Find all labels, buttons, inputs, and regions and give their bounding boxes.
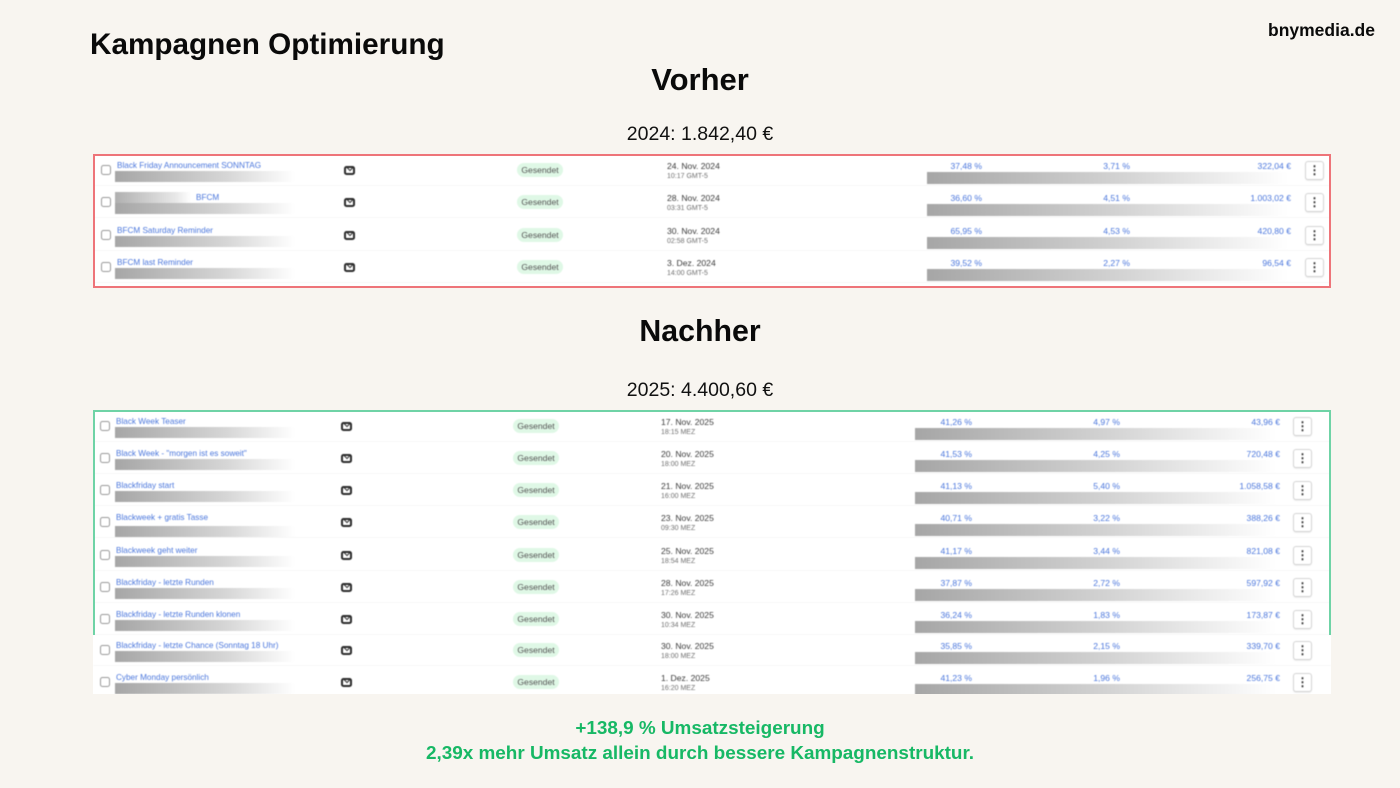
send date: 02:58 GMT-5 <box>667 238 708 245</box>
row: Blackfriday letzte Chance <box>93 634 1331 666</box>
campaign name <box>114 640 281 662</box>
send date <box>660 641 714 660</box>
metrics: 4,97 % <box>1093 417 1120 427</box>
metrics: 3,44 % <box>1093 546 1120 556</box>
send date: 18:15 MEZ <box>661 429 695 436</box>
status badge: Gesendet <box>517 677 555 687</box>
metrics <box>926 258 1292 282</box>
campaign name <box>114 578 281 600</box>
menu button: ⋮ <box>1308 228 1320 242</box>
metrics: 5,40 % <box>1093 481 1120 491</box>
campaign name: Blackweek + gratis Tasse <box>116 512 208 522</box>
send date <box>660 513 714 532</box>
checkbox <box>101 165 111 175</box>
metrics: 1.058,58 € <box>1239 481 1280 491</box>
send date: 16:20 MEZ <box>661 685 695 692</box>
send date <box>666 258 716 277</box>
metrics: 41,23 % <box>940 673 972 683</box>
metrics <box>926 193 1292 216</box>
menu button <box>1305 193 1324 212</box>
send date: 28. Nov. 2025 <box>661 578 714 588</box>
icon: mail <box>341 646 352 655</box>
menu button <box>1293 610 1312 629</box>
metrics: 1,96 % <box>1093 673 1120 683</box>
send date: 25. Nov. 2025 <box>661 546 714 556</box>
brand label: bnymedia.de <box>1268 20 1375 40</box>
status badge: Gesendet <box>517 614 555 624</box>
campaign name: Cyber Monday persönlich <box>116 672 209 682</box>
metrics: 322,04 € <box>1258 161 1291 171</box>
panel: campaign table 2025 <box>93 410 1331 694</box>
metrics: 37,48 % <box>950 161 982 171</box>
send date: 30. Nov. 2024 <box>667 226 720 236</box>
status badge <box>513 643 559 657</box>
send date: 10:34 MEZ <box>661 622 695 629</box>
metrics: 41,13 % <box>940 481 972 491</box>
campaign name: Blackfriday start <box>116 480 174 490</box>
menu button: ⋮ <box>1296 515 1308 529</box>
campaign name <box>114 192 281 214</box>
panel: campaign table 2024 <box>93 154 1331 288</box>
metrics: 597,92 € <box>1247 578 1280 588</box>
metrics: 41,53 % <box>940 449 972 459</box>
metrics: 2,72 % <box>1093 578 1120 588</box>
heading: Vorher: Vorher <box>651 62 749 97</box>
metrics: 1,83 % <box>1093 610 1120 620</box>
campaign name: Blackfriday - letzte Runden klonen <box>116 610 240 618</box>
campaign name: Blackfriday - letzte Runden <box>116 578 214 586</box>
title: Kampagnen Optimierung <box>90 28 445 61</box>
send date <box>666 161 720 180</box>
metrics <box>914 578 1280 602</box>
status badge <box>513 612 559 626</box>
result summary <box>426 718 974 764</box>
metrics <box>914 673 1280 694</box>
row: Blackfriday letzte Runden <box>93 571 1331 603</box>
status badge: Gesendet <box>521 197 559 207</box>
menu button <box>1293 481 1312 500</box>
row: Cyber Monday persönlich <box>93 666 1331 698</box>
metrics: 4,51 % <box>1103 193 1130 203</box>
menu button: ⋮ <box>1296 548 1308 562</box>
send date <box>666 193 720 212</box>
metrics: 4,53 % <box>1103 226 1130 236</box>
row: BFCM <box>93 186 1331 218</box>
heading: Nachher: Nachher <box>639 315 761 348</box>
status badge: Gesendet <box>517 421 555 431</box>
send date: 3. Dez. 2024 <box>667 258 716 268</box>
campaign name <box>114 610 281 632</box>
metrics: 41,17 % <box>940 546 972 556</box>
status badge <box>513 548 559 562</box>
send date: 20. Nov. 2025 <box>661 449 714 459</box>
menu button: ⋮ <box>1296 451 1308 465</box>
send date: 18:00 MEZ <box>661 461 695 468</box>
send date: 24. Nov. 2024 <box>667 161 720 171</box>
icon: mail <box>341 422 352 431</box>
icon: mail <box>344 166 355 175</box>
status badge <box>517 163 563 177</box>
menu button: ⋮ <box>1296 483 1308 497</box>
send date: 09:30 MEZ <box>661 525 695 532</box>
campaign name <box>114 546 281 568</box>
send date: 17:26 MEZ <box>661 590 695 597</box>
metrics: 388,26 € <box>1247 513 1280 523</box>
campaign name <box>114 672 281 694</box>
checkbox <box>100 614 110 624</box>
icon: mail <box>341 615 352 624</box>
metrics: 43,96 € <box>1251 417 1280 427</box>
icon: mail <box>344 198 355 207</box>
send date: 30. Nov. 2025 <box>661 610 714 620</box>
checkbox <box>100 421 110 431</box>
metrics: 3,22 % <box>1093 513 1120 523</box>
campaign name: BFCM last Reminder <box>117 258 193 266</box>
campaign name: Black Week Teaser <box>116 416 186 426</box>
icon: mail <box>341 486 352 495</box>
status badge <box>517 260 563 274</box>
send date <box>660 578 714 597</box>
send date <box>666 226 720 245</box>
metrics: 2,15 % <box>1093 641 1120 651</box>
icon: mail <box>341 583 352 592</box>
menu button: ⋮ <box>1296 675 1308 689</box>
send date: 17. Nov. 2025 <box>661 417 714 427</box>
status badge: Gesendet <box>517 582 555 592</box>
metrics: 173,87 € <box>1247 610 1280 620</box>
status badge: Gesendet <box>517 517 555 527</box>
campaign name <box>114 160 281 182</box>
revenue 2025: 2025: 4.400,60 € <box>627 379 773 401</box>
menu button <box>1293 641 1312 660</box>
row: Blackweek gratis Tasse <box>93 506 1331 538</box>
send date: 18:54 MEZ <box>661 558 695 565</box>
campaign name: Blackweek geht weiter <box>116 546 197 554</box>
status badge: Gesendet <box>517 550 555 560</box>
menu button: ⋮ <box>1308 195 1320 209</box>
row: BFCM Saturday Reminder <box>93 219 1331 251</box>
status badge: Gesendet <box>521 165 559 175</box>
metrics: 35,85 % <box>940 641 972 651</box>
metrics <box>914 481 1280 504</box>
send date: 28. Nov. 2024 <box>667 193 720 203</box>
icon: mail <box>344 263 355 272</box>
metrics: 96,54 € <box>1262 258 1291 268</box>
send date <box>661 673 710 692</box>
campaign name: BFCM Saturday Reminder <box>117 226 213 234</box>
send date: 30. Nov. 2025 <box>661 641 714 651</box>
send date <box>660 449 714 468</box>
send date: 03:31 GMT-5 <box>667 205 708 212</box>
campaign name: Black Week - "morgen ist es soweit" <box>116 448 247 458</box>
status badge <box>513 675 559 689</box>
metrics <box>914 546 1280 570</box>
checkbox <box>100 677 110 687</box>
campaign name <box>114 512 281 538</box>
send date: 21. Nov. 2025 <box>661 481 714 491</box>
metrics: 37,87 % <box>940 578 972 588</box>
status badge <box>513 483 559 497</box>
metrics: 2,27 % <box>1103 258 1130 268</box>
campaign name <box>114 480 281 502</box>
menu button <box>1293 578 1312 597</box>
campaign name <box>114 448 281 470</box>
status badge: Gesendet <box>521 262 559 272</box>
row: Blackfriday letzte Runden klonen <box>93 603 1331 635</box>
metrics: 339,70 € <box>1247 641 1280 651</box>
menu button: ⋮ <box>1296 580 1308 594</box>
campaign name <box>114 258 281 280</box>
icon: mail <box>344 231 355 240</box>
menu button: ⋮ <box>1296 643 1308 657</box>
send date: 1. Dez. 2025 <box>661 673 710 683</box>
metrics: 36,60 % <box>950 193 982 203</box>
metrics: 36,24 % <box>940 610 972 620</box>
campaign name: Blackfriday - letzte Chance (Sonntag 18 Uhr) <box>116 640 278 650</box>
menu button <box>1293 449 1312 468</box>
metrics: 821,08 € <box>1247 546 1280 556</box>
metrics: 4,25 % <box>1093 449 1120 459</box>
icon: mail <box>341 551 352 560</box>
metrics: 65,95 % <box>950 226 982 236</box>
campaign name: Black Friday Announcement SONNTAG <box>117 160 261 170</box>
status badge <box>513 419 559 433</box>
metrics: 41,26 % <box>940 417 972 427</box>
checkbox <box>100 453 110 463</box>
revenue 2024: 2024: 1.842,40 € <box>627 123 773 145</box>
menu button <box>1293 417 1312 436</box>
metrics <box>914 513 1280 536</box>
menu button <box>1293 546 1312 565</box>
status badge <box>513 515 559 529</box>
row: Blackweek geht weiter <box>93 539 1331 571</box>
menu button <box>1305 161 1324 180</box>
status badge: Gesendet <box>517 485 555 495</box>
metrics <box>926 161 1292 184</box>
menu button: ⋮ <box>1308 260 1320 274</box>
metrics: 40,71 % <box>940 513 972 523</box>
send date: 23. Nov. 2025 <box>661 513 714 523</box>
menu button <box>1305 258 1324 277</box>
metrics <box>914 641 1280 664</box>
checkbox <box>100 645 110 655</box>
status badge <box>513 451 559 465</box>
checkbox <box>101 230 111 240</box>
send date <box>660 481 714 500</box>
checkbox <box>100 485 110 495</box>
metrics: 720,48 € <box>1247 449 1280 459</box>
menu button <box>1293 513 1312 532</box>
menu button <box>1293 673 1312 692</box>
menu button: ⋮ <box>1296 612 1308 626</box>
checkbox <box>100 582 110 592</box>
send date: 10:17 GMT-5 <box>667 173 708 180</box>
menu button <box>1305 226 1324 245</box>
campaign name <box>114 226 281 248</box>
result summary: +138,9 % Umsatzsteigerung <box>575 718 825 739</box>
metrics: 1.003,02 € <box>1250 193 1291 203</box>
campaign name: BFCM <box>196 192 219 202</box>
status badge: Gesendet <box>521 230 559 240</box>
metrics: 256,75 € <box>1247 673 1280 683</box>
send date: 14:00 GMT-5 <box>667 270 708 277</box>
metrics <box>914 449 1280 472</box>
icon: mail <box>341 518 352 527</box>
status badge <box>517 228 563 242</box>
metrics <box>914 610 1280 634</box>
result summary: 2,39x mehr Umsatz allein durch bessere Kampagnenstruktur. <box>426 743 974 764</box>
green frame around 2025 table <box>93 410 1331 635</box>
menu button: ⋮ <box>1296 419 1308 433</box>
metrics <box>914 417 1280 440</box>
status badge <box>517 195 563 209</box>
send date: 16:00 MEZ <box>661 493 695 500</box>
row: BFCM last Reminder <box>93 251 1331 283</box>
metrics <box>926 226 1292 250</box>
row: Black Week Teaser <box>93 410 1331 442</box>
status badge: Gesendet <box>517 453 555 463</box>
status badge <box>513 580 559 594</box>
send date <box>661 417 714 436</box>
row: Black Friday Announcement <box>93 154 1331 186</box>
send date <box>660 610 714 629</box>
row: Black Week morgen <box>93 442 1331 474</box>
menu button: ⋮ <box>1308 163 1320 177</box>
icon: mail <box>341 454 352 463</box>
send date <box>660 546 714 565</box>
checkbox <box>101 197 111 207</box>
checkbox <box>101 262 111 272</box>
status badge: Gesendet <box>517 645 555 655</box>
checkbox <box>100 550 110 560</box>
checkbox <box>100 517 110 527</box>
row: Blackfriday start <box>93 474 1331 506</box>
metrics: 3,71 % <box>1103 161 1130 171</box>
metrics: 39,52 % <box>950 258 982 268</box>
campaign name <box>114 416 281 438</box>
send date: 18:00 MEZ <box>661 653 695 660</box>
red frame around 2024 table <box>93 154 1331 288</box>
icon: mail <box>341 678 352 687</box>
metrics: 420,80 € <box>1258 226 1291 236</box>
